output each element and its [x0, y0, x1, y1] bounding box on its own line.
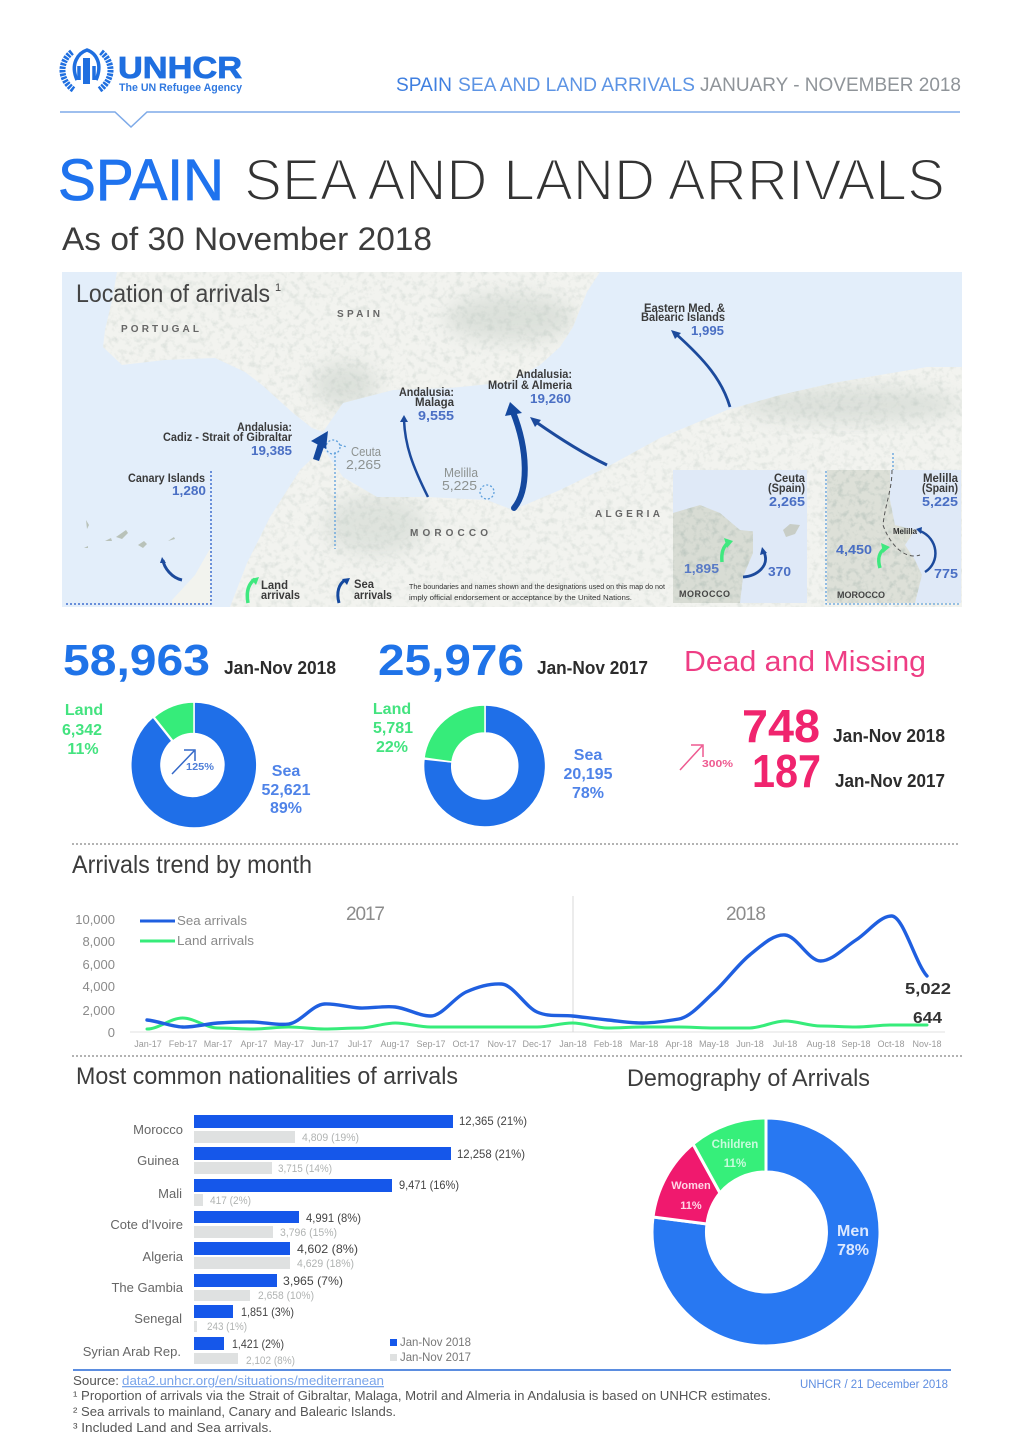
demography heading: Demography of Arrivals	[627, 1065, 870, 1092]
label: Canary Islands: 1,280	[172, 483, 206, 498]
inset: Melilla: 5,225	[922, 494, 958, 509]
panel: demography	[627, 1065, 880, 1346]
country names: Guinea	[137, 1153, 180, 1168]
footnotes	[73, 1388, 771, 1435]
inset: Melilla	[826, 470, 961, 604]
bars 2018	[194, 1115, 453, 1350]
x axis labels: Aug-17	[380, 1039, 410, 1049]
land label 2017: 5,781	[373, 720, 413, 737]
country names	[83, 1122, 184, 1359]
bar legend: Jan-Nov 2017	[400, 1350, 471, 1364]
footnotes: ² Sea arrivals to mainland, Canary and Balearic Islands.	[73, 1404, 396, 1419]
label: Cadiz: Cadiz - Strait of Gibraltar	[163, 432, 292, 444]
footnotes: ³ Included Land and Sea arrivals.	[73, 1420, 272, 1435]
panel: dead and missing	[680, 646, 945, 797]
period 2017: Jan-Nov 2017	[835, 771, 945, 791]
inset: Ceuta	[673, 470, 807, 603]
sea label 2018	[262, 763, 311, 817]
footnotes: ¹ Proportion of arrivals via the Strait of Gibraltar, Malaga, Motril and Almeria in Andalusia is based on UNHCR estimates.	[73, 1388, 771, 1403]
country labels: PORTUGAL	[121, 324, 199, 335]
y axis labels	[75, 912, 115, 1040]
slice labels: Men	[837, 1223, 869, 1240]
values 2017: 2,658 (10%)	[258, 1290, 314, 1302]
values 2018: 4,991 (8%)	[306, 1211, 361, 1225]
inset: Melilla: Melilla	[923, 473, 959, 485]
values 2018: 1,421 (2%)	[232, 1337, 284, 1351]
header	[60, 50, 961, 127]
value labels: 5,022	[905, 981, 951, 998]
label: Malaga: Malaga	[415, 397, 455, 409]
country names: Syrian Arab Rep.	[83, 1344, 181, 1359]
x axis labels: May-18	[699, 1039, 729, 1049]
footer	[73, 1370, 951, 1435]
values 2018: 9,471 (16%)	[399, 1178, 459, 1192]
label: Motril and Almeria: 19,260	[530, 391, 571, 406]
x axis labels: Jun-17	[311, 1039, 339, 1049]
values 2018: 4,602 (8%)	[297, 1242, 358, 1256]
donut chart 2018	[131, 702, 257, 828]
label: Eastern Med: Eastern Med. &	[644, 303, 725, 315]
y axis labels: 0	[108, 1025, 115, 1040]
period 2018: Jan-Nov 2018	[833, 726, 945, 746]
label: Melilla	[442, 465, 479, 493]
arrow: Cadiz Strait of Gibraltar	[311, 431, 328, 461]
x axis labels: Oct-17	[452, 1039, 480, 1049]
map land	[62, 272, 962, 607]
period 2018: Jan-Nov 2018	[224, 658, 336, 678]
map legend: land arrivals: arrivals	[261, 590, 300, 602]
total 2017: 25,976	[378, 636, 524, 685]
x axis labels: Mar-18	[630, 1039, 658, 1049]
values 2017	[207, 1132, 359, 1367]
logo: UNHCR: UNHCR	[118, 50, 242, 85]
map disclaimer	[409, 584, 665, 602]
country labels: SPAIN	[337, 309, 380, 320]
logo: UNHCR	[62, 50, 243, 94]
total 2018: 58,963	[63, 636, 210, 685]
country names: Senegal	[134, 1311, 182, 1326]
slice labels: 11%	[724, 1158, 746, 1170]
year labels	[346, 904, 766, 925]
chart legend: Sea arrivals	[177, 913, 248, 928]
x axis labels	[134, 1039, 942, 1049]
values 2017: 243 (1%)	[207, 1321, 247, 1333]
values 2018	[232, 1114, 527, 1351]
values 2018: 12,258 (21%)	[457, 1147, 525, 1161]
label: Eastern Med	[641, 303, 725, 338]
map disclaimer: The boundaries and names shown and the designations used on this map do not	[409, 584, 665, 591]
x axis labels: Jan-18	[559, 1039, 587, 1049]
title: SPAIN	[58, 148, 224, 213]
arrow: Motril	[505, 402, 525, 508]
inset: Ceuta: 2,265	[769, 494, 805, 509]
title: SEA AND LAND ARRIVALS	[244, 148, 945, 213]
report date: UNHCR / 21 December 2018	[800, 1379, 948, 1391]
map heading: 1	[275, 282, 281, 294]
inset: Ceuta: (Spain)	[768, 483, 805, 495]
sea label 2017	[564, 747, 613, 802]
country names: The Gambia	[111, 1280, 184, 1295]
subtitle: As of 30 November 2018	[62, 221, 432, 257]
country labels	[121, 309, 660, 539]
year labels: 2018	[726, 904, 766, 925]
chart legend: Land arrivals	[177, 933, 255, 948]
land label 2017: Land	[373, 701, 411, 718]
header rule with chevron	[60, 112, 960, 127]
label: Motril and Almeria: Andalusia:	[516, 369, 572, 381]
land label 2018	[62, 702, 103, 758]
inset: Melilla: 775	[934, 566, 958, 581]
sea label 2017: Sea	[574, 747, 602, 764]
growth arrow 125%: 125%	[186, 762, 214, 773]
arrow: Almeria	[530, 417, 607, 465]
icon: UNHCR emblem	[62, 50, 111, 90]
panel: total arrivals 2017	[373, 636, 648, 827]
label: Melilla: 5,225	[442, 478, 477, 493]
land label 2017	[373, 701, 413, 756]
header title: JANUARY - NOVEMBER 2018	[700, 75, 961, 96]
nationalities heading: Most common nationalities of arrivals	[76, 1063, 458, 1090]
inset: Ceuta: 1,895	[684, 561, 719, 576]
y axis labels: 6,000	[82, 957, 115, 972]
bar legend: Jan-Nov 2018	[400, 1335, 471, 1349]
x axis labels: Oct-18	[877, 1039, 905, 1049]
label: Cadiz: 19,385	[251, 443, 292, 458]
map legend: sea arrivals: arrivals	[354, 590, 392, 602]
source line: data2.unhcr.org/en/situations/mediterranean	[122, 1373, 384, 1388]
x axis labels: Jul-17	[348, 1039, 372, 1049]
trend heading: Arrivals trend by month	[72, 851, 312, 879]
dead and missing 2017: 187	[752, 745, 821, 797]
line: land arrivals	[147, 1018, 927, 1029]
bars 2017	[194, 1131, 295, 1364]
slice labels: Children	[712, 1139, 758, 1151]
inset: Melilla: Melilla	[893, 527, 918, 536]
inset: Ceuta: Ceuta	[774, 473, 806, 485]
dead and missing 2018: 748	[742, 700, 820, 752]
sea label 2018: 89%	[270, 800, 302, 817]
y axis labels: 2,000	[82, 1003, 115, 1018]
x axis labels: Sep-18	[841, 1039, 871, 1049]
label: Eastern Med: 1,995	[691, 323, 724, 338]
header title: SEA AND LAND ARRIVALS	[458, 75, 695, 96]
label: Ceuta	[346, 444, 382, 472]
inset: Melilla: MOROCCO	[837, 590, 885, 600]
map legend: land arrivals: Land	[261, 580, 288, 592]
x axis labels: Jul-18	[773, 1039, 797, 1049]
x axis labels: Feb-18	[594, 1039, 622, 1049]
period 2017: Jan-Nov 2017	[537, 658, 648, 678]
dead and missing heading: Dead and Missing	[684, 646, 926, 678]
inset: Melilla: (Spain)	[922, 483, 958, 495]
y axis labels: 10,000	[75, 912, 115, 927]
growth arrow 125%	[172, 750, 214, 774]
Canary inset	[62, 470, 211, 605]
map sea	[62, 272, 962, 607]
label: Cadiz: Andalusia:	[237, 422, 292, 434]
label: Canary Islands	[128, 473, 206, 498]
x axis labels: Nov-18	[912, 1039, 942, 1049]
slice labels	[671, 1139, 869, 1259]
country names: Algeria	[143, 1249, 184, 1264]
values 2017: 417 (2%)	[210, 1195, 251, 1207]
inset: Ceuta: 370	[768, 564, 791, 579]
donut chart demography	[652, 1118, 880, 1346]
panel: nationalities	[76, 1063, 527, 1367]
x axis labels: Apr-17	[240, 1039, 268, 1049]
label: Malaga	[399, 387, 455, 423]
label: Malaga: 9,555	[418, 408, 454, 423]
label: Malaga: Andalusia:	[399, 387, 454, 399]
inset: Ceuta: MOROCCO	[679, 589, 730, 599]
header title: SPAIN	[396, 75, 452, 96]
y axis labels: 8,000	[82, 934, 115, 949]
x axis labels: Jan-17	[134, 1039, 162, 1049]
label: Eastern Med: Balearic Islands	[641, 312, 725, 324]
value labels	[905, 981, 951, 1027]
growth arrow 300%	[680, 745, 733, 770]
sea label 2018: 52,621	[262, 782, 311, 799]
slice labels: 78%	[837, 1242, 869, 1259]
slice labels: 11%	[680, 1200, 702, 1212]
growth arrow 300%: 300%	[702, 759, 733, 770]
x axis labels: Jun-18	[736, 1039, 764, 1049]
slice labels: Women	[671, 1180, 711, 1192]
inset: Melilla: 4,450	[836, 542, 872, 557]
x axis labels: Aug-18	[806, 1039, 836, 1049]
x axis labels: Mar-17	[204, 1039, 232, 1049]
dotted leaders to Ceuta and Melilla	[326, 440, 893, 549]
x axis labels: May-17	[274, 1039, 304, 1049]
arrow: Malaga	[400, 415, 428, 497]
country names: Mali	[158, 1186, 182, 1201]
values 2017: 4,629 (18%)	[297, 1258, 354, 1270]
chart legend	[140, 913, 255, 948]
logo: UNHCR: The UN Refugee Agency	[119, 82, 243, 94]
x axis labels: Nov-17	[487, 1039, 517, 1049]
map legend: sea arrivals	[338, 578, 392, 603]
values 2017: 2,102 (8%)	[246, 1355, 295, 1367]
map legend: land arrivals	[247, 577, 300, 603]
panel: arrivals trend by month	[72, 851, 951, 1049]
land label 2018: 6,342	[62, 722, 102, 739]
country names: Cote d'Ivoire	[110, 1217, 183, 1232]
values 2017: 4,809 (19%)	[302, 1132, 359, 1144]
panel: map of arrivals	[62, 272, 962, 607]
sea label 2018: Sea	[272, 763, 300, 780]
x axis labels: Apr-18	[665, 1039, 693, 1049]
map heading: Location of arrivals	[76, 280, 270, 308]
sea label 2017: 20,195	[564, 766, 613, 783]
map disclaimer: imply official endorsement or acceptance by the United Nations.	[409, 595, 632, 602]
label: Ceuta: 2,265	[346, 457, 381, 472]
country labels: ALGERIA	[595, 509, 660, 520]
values 2017: 3,715 (14%)	[278, 1163, 332, 1175]
x axis labels: Dec-17	[522, 1039, 552, 1049]
y axis labels: 4,000	[82, 979, 115, 994]
land label 2018: 11%	[67, 741, 99, 758]
panel: total arrivals 2018	[62, 636, 336, 828]
label: Motril and Almeria	[488, 369, 573, 406]
x axis labels: Sep-17	[416, 1039, 446, 1049]
label: Motril and Almeria: Motril & Almeria	[488, 380, 573, 392]
land label 2018: Land	[65, 702, 103, 719]
label: Cadiz	[163, 422, 292, 458]
bar legend	[390, 1335, 471, 1364]
year labels: 2017	[346, 904, 385, 925]
values 2018: 1,851 (3%)	[241, 1305, 294, 1319]
country names: Morocco	[133, 1122, 183, 1137]
map legend: sea arrivals: Sea	[354, 579, 375, 591]
country labels: MOROCCO	[410, 528, 488, 539]
source line: Source:	[73, 1373, 119, 1388]
line: sea arrivals	[147, 916, 927, 1027]
arrow: Eastern Med and Balearic	[671, 330, 730, 407]
x axis labels: Feb-17	[169, 1039, 197, 1049]
donut chart 2017	[424, 705, 546, 827]
values 2017: 3,796 (15%)	[280, 1227, 337, 1239]
label: Canary Islands: Canary Islands	[128, 473, 205, 485]
value labels: 644	[913, 1010, 942, 1027]
sea label 2017: 78%	[572, 785, 604, 802]
values 2018: 12,365 (21%)	[459, 1114, 527, 1128]
values 2018: 3,965 (7%)	[283, 1274, 343, 1288]
label: Ceuta: Ceuta	[351, 444, 382, 459]
arrow: Canary Islands	[160, 557, 182, 580]
land label 2017: 22%	[376, 739, 408, 756]
label: Melilla: Melilla	[444, 465, 479, 480]
